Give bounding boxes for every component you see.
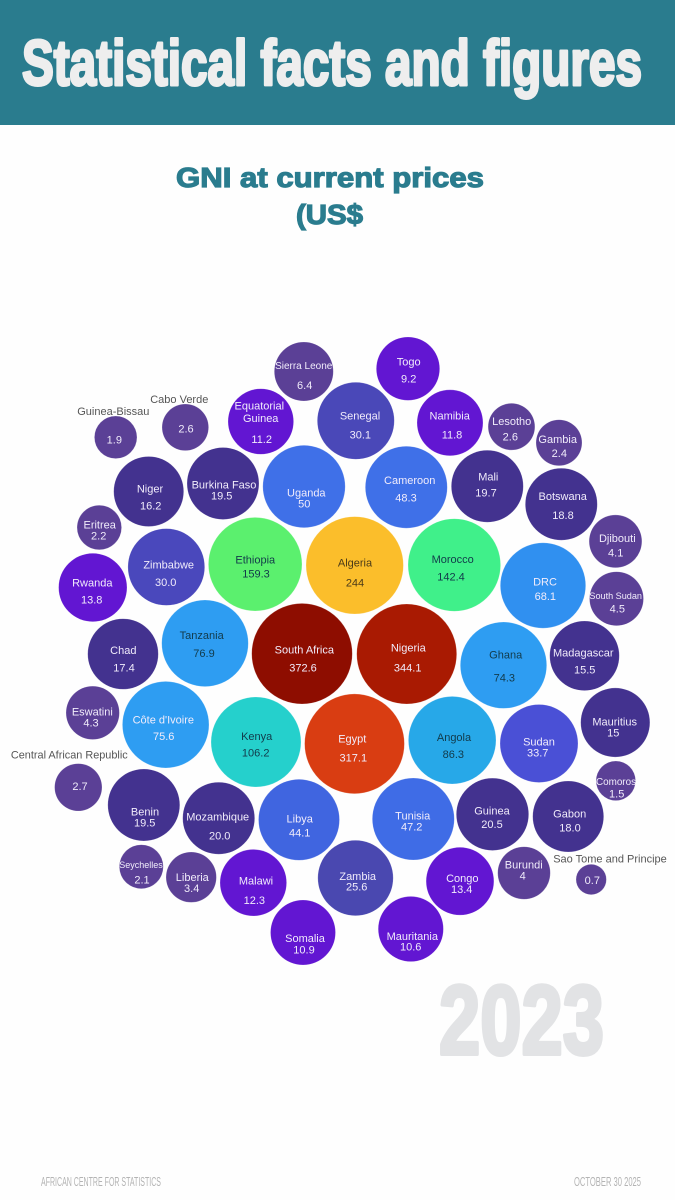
bubble: Comoros: 1.5: [609, 789, 624, 801]
bubble: Burundi: 4: [520, 870, 526, 882]
bubble: Zimbabwe: [128, 529, 205, 605]
bubble: Equatorial Guinea: 11.2: [251, 434, 272, 446]
bubble: Tanzania: 76.9: [193, 648, 215, 660]
bubble: Madagascar: 15.5: [574, 664, 595, 676]
bubble: Central African Republic: 2.7: [72, 781, 88, 793]
bubble: Burkina Faso: [187, 448, 259, 520]
bubble: Liberia: Liberia: [176, 872, 210, 884]
bubble: Nigeria: 344.1: [394, 662, 421, 674]
bubble: Algeria: Algeria: [338, 557, 373, 569]
bubble: Mali: Mali: [478, 472, 498, 484]
bubble: Malawi: Malawi: [239, 875, 273, 887]
bubble: Malawi: [220, 849, 287, 916]
bubble: Angola: 86.3: [443, 749, 464, 761]
bubble: Senegal: 30.1: [350, 430, 371, 442]
bubble: Seychelles: [119, 845, 163, 889]
bubble: Congo: 13.4: [451, 884, 472, 896]
bubble: South Sudan: South Sudan: [589, 591, 642, 601]
bubble: Chad: 17.4: [113, 662, 135, 674]
bubble: Sudan: [500, 704, 578, 782]
bubble: Ethiopia: Ethiopia: [235, 554, 276, 566]
bubble: Libya: [258, 779, 340, 860]
bubble: Namibia: Namibia: [430, 411, 471, 423]
bubble: Mozambique: Mozambique: [186, 811, 249, 823]
bubble: Eswatini: [66, 686, 119, 740]
bubble: Benin: 19.5: [134, 817, 155, 829]
bubble chart: GNI by country: [11, 337, 667, 965]
bubble: Morocco: 142.4: [437, 572, 465, 584]
bubble: Guinea: [456, 778, 529, 850]
bubble: Rwanda: 13.8: [81, 594, 102, 606]
bubble: Malawi: 12.3: [244, 895, 265, 907]
bubble: Guinea-Bissau: Guinea-Bissau: [77, 406, 149, 418]
bubble: Algeria: 244: [346, 578, 364, 590]
bubble: Guinea: 20.5: [481, 819, 503, 831]
bubble: Congo: Congo: [446, 873, 479, 885]
bubble: Botswana: Botswana: [539, 491, 588, 503]
bubble: Benin: [108, 769, 180, 841]
bubble: Egypt: 317.1: [340, 752, 367, 764]
bubble: Cabo Verde: Cabo Verde: [150, 394, 208, 406]
bubble: Chad: [88, 619, 158, 689]
bubble: Central African Republic: [11, 749, 128, 811]
bubble: Tanzania: [162, 600, 248, 687]
bubble: Liberia: [166, 852, 216, 902]
bubble: Djibouti: Djibouti: [599, 533, 636, 545]
bubble: Rwanda: Rwanda: [72, 578, 113, 590]
bubble: Eswatini: Eswatini: [72, 707, 113, 719]
subtitle: GNI at current prices: [176, 162, 484, 193]
bubble: Mauritania: Mauritania: [387, 931, 439, 943]
bubble: Côte d'Ivoire: 75.6: [153, 731, 174, 743]
bubble: Mali: 19.7: [475, 488, 497, 500]
bubble: Seychelles: 2.1: [134, 875, 150, 887]
bubble: Angola: Angola: [437, 732, 472, 744]
bubble: Guinea-Bissau: 1.9: [107, 434, 122, 446]
bubble: Djibouti: 4.1: [608, 548, 623, 560]
bubble: Benin: Benin: [131, 806, 159, 818]
bubble: DRC: [500, 543, 586, 628]
year label: 2023: [439, 965, 604, 1075]
bubble: Gambia: 2.4: [552, 448, 567, 460]
bubble: Kenya: [211, 697, 301, 787]
bubble: Ethiopia: 159.3: [242, 569, 270, 581]
bubble: Zambia: [318, 840, 393, 916]
bubble: Lesotho: 2.6: [503, 431, 518, 443]
bubble: Somalia: Somalia: [285, 933, 326, 945]
bubble: Senegal: [317, 382, 394, 459]
bubble: Cameroon: 48.3: [395, 493, 417, 505]
bubble: Niger: Niger: [137, 483, 163, 495]
bubble: Sierra Leone: Sierra Leone: [275, 361, 333, 372]
bubble: Tunisia: Tunisia: [395, 810, 431, 822]
bubble: Zimbabwe: 30.0: [155, 577, 176, 589]
header banner: [0, 0, 675, 125]
bubble: Eritrea: [77, 505, 122, 550]
bubble: Uganda: 50: [298, 499, 310, 511]
bubble: Sao Tome and Principe: Sao Tome and Principe: [553, 854, 667, 866]
bubble: Guinea-Bissau: [77, 406, 149, 459]
bubble: Mauritania: [378, 896, 443, 962]
bubble: Eritrea: Eritrea: [83, 519, 117, 531]
bubble: South Africa: [252, 603, 352, 704]
bubble: South Sudan: [589, 572, 644, 626]
bubble: Mozambique: 20.0: [209, 831, 230, 843]
bubble: Namibia: 11.8: [442, 429, 462, 441]
footer: source: AFRICAN CENTRE FOR STATISTICS: [41, 1175, 161, 1189]
bubble: Ghana: Ghana: [489, 650, 523, 662]
bubble: Kenya: 106.2: [242, 748, 269, 760]
bubble: Libya: 44.1: [289, 828, 310, 840]
bubble: Tunisia: [372, 778, 454, 860]
bubble: Libya: Libya: [287, 814, 314, 826]
bubble: Gabon: 18.0: [559, 822, 581, 834]
bubble: Niger: [114, 456, 184, 526]
bubble: Burundi: Burundi: [505, 859, 543, 871]
bubble: Morocco: Morocco: [432, 554, 474, 566]
bubble: Cameroon: [365, 446, 447, 528]
bubble: Senegal: Senegal: [340, 411, 380, 423]
bubble: DRC: 68.1: [535, 591, 556, 603]
bubble: Gambia: [536, 420, 582, 466]
bubble: Algeria: [306, 517, 403, 614]
bubble: Equatorial Guinea: Guinea: [243, 413, 279, 425]
bubble: Mauritania: 10.6: [400, 942, 421, 954]
bubble: Nigeria: [357, 604, 457, 704]
bubble: Congo: [426, 847, 494, 915]
bubble: Madagascar: Madagascar: [553, 647, 614, 659]
bubble: Equatorial Guinea: [228, 389, 294, 454]
bubble: Côte d'Ivoire: [122, 681, 209, 768]
bubble: Rwanda: [59, 553, 127, 622]
bubble: Angola: [408, 696, 496, 784]
bubble: Guinea: Guinea: [474, 805, 511, 817]
subtitle: [176, 162, 484, 230]
bubble: Botswana: 18.8: [552, 510, 574, 522]
bubble: DRC: DRC: [533, 577, 557, 589]
bubble: Zambia: 25.6: [346, 882, 367, 894]
bubble: Mali: [451, 450, 523, 522]
bubble: Egypt: [305, 694, 404, 794]
bubble: Lesotho: [488, 403, 535, 450]
bubble: Ethiopia: [208, 517, 302, 611]
bubble: Central African Republic: Central African Republic: [11, 749, 128, 761]
bubble: Madagascar: [550, 621, 619, 691]
bubble: Sao Tome and Principe: 0.7: [585, 875, 600, 887]
bubble: Morocco: [408, 519, 501, 611]
subtitle: (US$: [296, 199, 363, 230]
bubble: Eswatini: 4.3: [83, 717, 99, 729]
bubble: Kenya: Kenya: [241, 731, 273, 743]
bubble: Mauritius: Mauritius: [592, 717, 638, 729]
bubble: South Sudan: 4.5: [610, 604, 625, 616]
bubble: Equatorial Guinea: Equatorial: [235, 400, 284, 412]
bubble: Somalia: 10.9: [293, 944, 315, 956]
bubble: Lesotho: Lesotho: [492, 416, 531, 428]
bubble: South Africa: South Africa: [275, 644, 335, 656]
bubble: Egypt: Egypt: [338, 733, 366, 745]
bubble: Comoros: [596, 761, 636, 801]
bubble: Togo: Togo: [397, 357, 421, 369]
bubble: Zambia: Zambia: [339, 871, 377, 883]
bubble: Togo: [376, 337, 440, 400]
bubble: Sao Tome and Principe: [553, 854, 667, 895]
bubble: Gabon: [533, 781, 604, 852]
bubble: Sudan: Sudan: [523, 736, 555, 748]
bubble: Burkina Faso: 19.5: [211, 491, 232, 503]
bubble: Djibouti: [589, 515, 642, 568]
bubble: Cameroon: Cameroon: [384, 475, 435, 487]
bubble: Zimbabwe: Zimbabwe: [143, 560, 194, 572]
bubble: Burundi: [498, 847, 550, 899]
bubble: Cabo Verde: [150, 394, 209, 451]
bubble: Sierra Leone: 6.4: [297, 380, 312, 392]
bubble: Gabon: Gabon: [553, 809, 586, 821]
bubble: Sudan: 33.7: [527, 747, 548, 759]
bubble: Niger: 16.2: [140, 500, 161, 512]
bubble: Eritrea: 2.2: [91, 531, 106, 543]
bubble: Botswana: [525, 468, 597, 540]
bubble: Mozambique: [183, 782, 255, 854]
bubble: Côte d'Ivoire: Côte d'Ivoire: [133, 715, 194, 727]
bubble: Tunisia: 47.2: [401, 821, 422, 833]
bubble: Mauritius: [581, 688, 650, 757]
bubble: Somalia: [270, 900, 336, 965]
bubble: Ghana: [460, 622, 547, 708]
bubble: Togo: 9.2: [401, 374, 416, 386]
bubble: Uganda: Uganda: [287, 488, 326, 500]
bubble: Mauritius: 15: [607, 727, 619, 739]
bubble: Nigeria: Nigeria: [391, 643, 427, 655]
bubble: South Africa: 372.6: [289, 662, 317, 674]
bubble: Burkina Faso: Burkina Faso: [192, 480, 256, 492]
bubble: Liberia: 3.4: [184, 883, 199, 895]
bubble: Namibia: [417, 390, 483, 456]
bubble: Cabo Verde: 2.6: [178, 423, 194, 435]
bubble: Ghana: 74.3: [494, 673, 515, 685]
bubble: Sierra Leone: [274, 342, 333, 401]
bubble: Gambia: Gambia: [538, 434, 578, 446]
bubble: Tanzania: Tanzania: [180, 630, 225, 642]
bubble: Uganda: [263, 445, 345, 528]
bubble: Chad: Chad: [110, 645, 136, 657]
bubble: Seychelles: Seychelles: [119, 860, 163, 870]
bubble: Comoros: Comoros: [596, 777, 636, 788]
